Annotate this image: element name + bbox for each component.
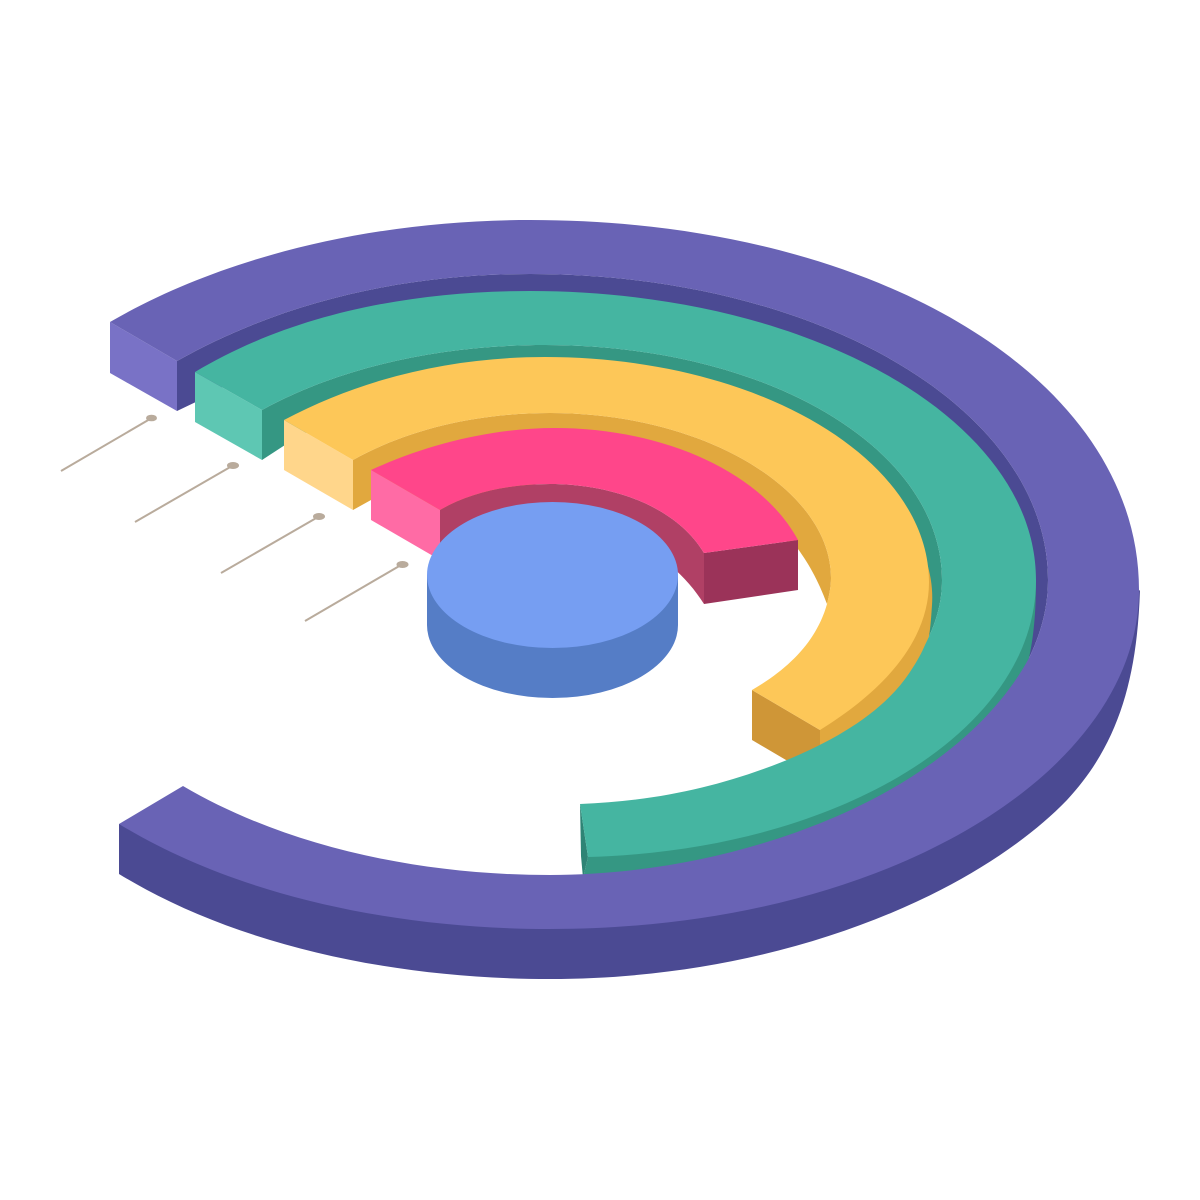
- pointer 3: [221, 513, 325, 573]
- disk top: [427, 502, 678, 648]
- purple end cap: [110, 322, 177, 411]
- yellow top surface: [284, 357, 929, 730]
- pink side cap: [371, 470, 440, 560]
- purple top surface: [110, 220, 1139, 929]
- pointer 2: [135, 462, 239, 522]
- green top surface: [195, 291, 1036, 857]
- purple ring: [110, 274, 1140, 979]
- pointer 4: [305, 561, 408, 621]
- purple outer wall: [119, 590, 1140, 979]
- disk wall: [427, 575, 678, 698]
- pink top surface: [371, 428, 798, 553]
- green ring walls: [195, 345, 1036, 878]
- green end wedge: [580, 804, 588, 878]
- yellow side cap: [284, 420, 353, 510]
- centre disk: [427, 502, 678, 698]
- yellow inner wall: [353, 413, 831, 604]
- purple inner wall: [177, 274, 1048, 658]
- green inner wall: [262, 345, 942, 645]
- green end cap: [195, 372, 262, 460]
- yellow ring: [284, 357, 932, 780]
- pink inner wall: [440, 484, 704, 604]
- yellow end cap: [752, 690, 820, 780]
- pink front end: [704, 540, 798, 604]
- pointer 1: [61, 415, 157, 471]
- green outer wall: [583, 580, 1036, 878]
- yellow outer wall: [820, 560, 932, 760]
- pink ring: [371, 428, 798, 604]
